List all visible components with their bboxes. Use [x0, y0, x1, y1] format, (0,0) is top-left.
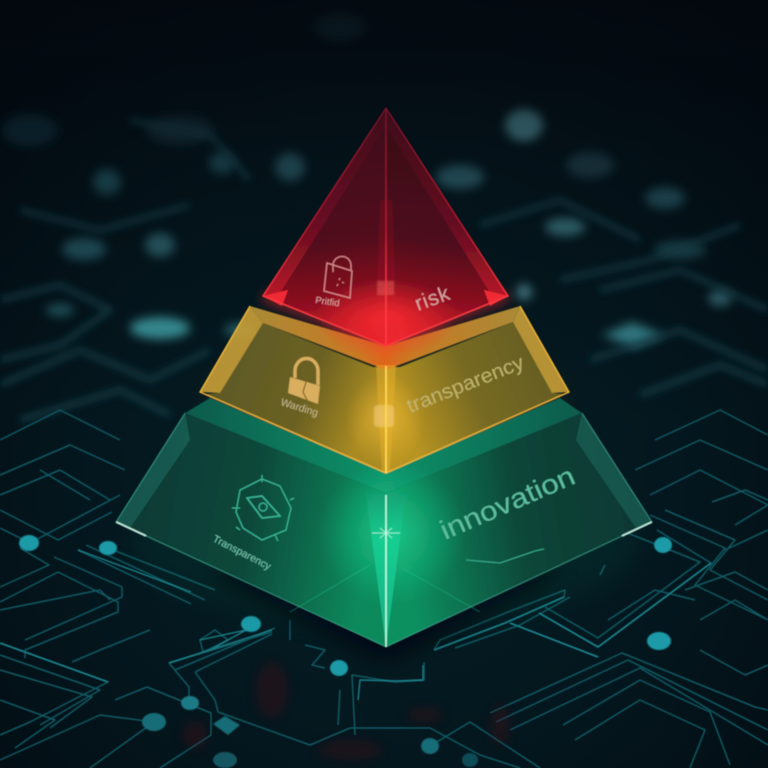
pyramid glow — [130, 296, 640, 660]
yellow top band — [250, 306, 520, 370]
label: innovation: innovation — [435, 461, 579, 546]
red light square — [377, 281, 394, 295]
green right face — [386, 413, 652, 647]
panel: red top tier — [263, 108, 508, 358]
circuit board traces — [0, 410, 768, 768]
red centre strip — [376, 200, 398, 346]
red edge highlights — [263, 108, 508, 346]
green left bevel — [116, 413, 190, 528]
red bottom glow — [314, 278, 458, 358]
panel: green base tier — [116, 398, 652, 647]
green edge highlights — [116, 413, 652, 647]
red right face — [386, 108, 508, 346]
icon: outlined padlock — [324, 256, 352, 298]
yellow light square — [374, 405, 394, 427]
green top band — [185, 398, 582, 493]
bright circuit traces — [0, 550, 711, 700]
yellow left face — [205, 323, 386, 473]
dark red reflections on the board — [183, 662, 509, 760]
green faint inner lines — [290, 565, 480, 612]
icon: filled padlock — [288, 358, 320, 404]
small circuit glyph — [466, 549, 544, 563]
yellow right face — [386, 322, 564, 473]
yellow centre glow — [345, 374, 425, 466]
red left face — [263, 108, 386, 346]
top vignette — [0, 0, 768, 430]
red centre line — [385, 108, 387, 346]
yellow right bevel — [513, 306, 569, 393]
pyramid body — [116, 108, 652, 647]
green centre glow — [318, 461, 466, 605]
green left face — [116, 413, 386, 647]
yellow centre line — [385, 366, 387, 473]
green bright corner glints — [116, 522, 652, 536]
green star glint — [372, 528, 400, 538]
label: Warding: Warding — [279, 396, 320, 419]
yellow edge highlights — [200, 306, 569, 473]
red right bevel — [386, 108, 508, 296]
green centre spike — [366, 493, 406, 647]
icon: eye in gear ring — [232, 475, 294, 541]
red left bevel — [263, 108, 386, 296]
blurred background circuit shapes — [2, 12, 732, 348]
label: Transparency: Transparency — [211, 533, 274, 573]
green right bevel — [576, 413, 652, 528]
label: Pritfid: Pritfid — [315, 295, 340, 309]
label: transparency: transparency — [404, 352, 527, 418]
label: risk: risk — [412, 282, 453, 316]
circuit nodes — [19, 535, 672, 768]
yellow left bevel — [200, 306, 263, 393]
red lower corners — [263, 290, 508, 306]
yellow centre strip — [376, 365, 396, 472]
panel: yellow middle tier — [200, 306, 569, 473]
green centre line — [385, 495, 387, 647]
blurred mid circuit traces — [0, 120, 768, 420]
